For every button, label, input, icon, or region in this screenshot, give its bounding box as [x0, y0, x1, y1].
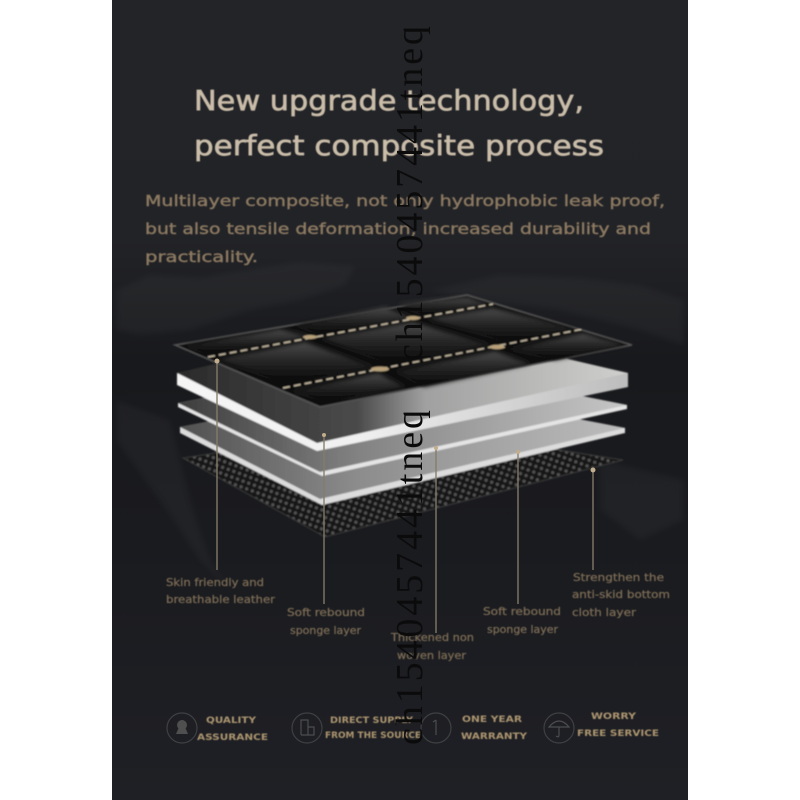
layered material illustration [175, 295, 632, 537]
watermark: lower: ch1540457441tneq [389, 410, 431, 745]
callout lines [214, 358, 596, 633]
intro paragraph: Multilayer composite, not only hydrophobic leak proof, [145, 192, 665, 210]
icon: factory [292, 713, 322, 743]
icon: umbrella [544, 713, 574, 743]
world map backdrop [116, 262, 684, 590]
feature: worry free service: WORRY [591, 712, 637, 722]
feature: direct supply [292, 713, 421, 743]
label: non woven: woven layer [397, 650, 467, 662]
label: bottom cloth: anti-skid bottom [572, 589, 670, 601]
label: bottom cloth [572, 572, 670, 619]
layer: non woven [178, 360, 627, 476]
icon: one year [421, 713, 451, 743]
title [194, 84, 604, 162]
feature: worry free service [544, 712, 659, 743]
label: lower sponge [483, 606, 561, 636]
label: bottom cloth: Strengthen the [573, 572, 664, 584]
label: lower sponge: sponge layer [487, 624, 559, 636]
layer: lower sponge [180, 385, 625, 505]
feature: worry free service: FREE SERVICE [577, 729, 659, 739]
feature: direct supply: FROM THE SOURCE [325, 731, 421, 741]
icon: medal [167, 713, 197, 743]
layer: anti-skid bottom cloth [183, 425, 623, 537]
intro paragraph: but also tensile deformation, increased durability and [145, 220, 651, 238]
page background panel [112, 0, 688, 800]
label: lower sponge: Soft rebound [483, 606, 561, 618]
feature: direct supply: DIRECT SUPPLY [330, 716, 414, 726]
label: non woven: Thickened non [390, 632, 474, 644]
layer: upper sponge [177, 320, 628, 451]
label: upper sponge: sponge layer [290, 625, 362, 637]
label: non woven [390, 632, 474, 662]
feature: warranty [421, 713, 528, 743]
label: leather: breathable leather [166, 594, 276, 606]
title: perfect composite process [194, 129, 604, 162]
watermark: upper: ch1540457441tneq [389, 26, 431, 361]
label: leather [166, 577, 276, 606]
feature: quality assurance: QUALITY [206, 716, 257, 726]
label: upper sponge [287, 607, 365, 637]
feature: warranty: ONE YEAR [462, 715, 522, 725]
stitch junctions [303, 316, 505, 371]
feature: quality assurance: ASSURANCE [197, 733, 268, 743]
title: New upgrade technology, [194, 84, 584, 117]
feature: warranty: WARRANTY [461, 732, 528, 742]
intro paragraph [145, 192, 665, 266]
label: bottom cloth: cloth layer [572, 607, 637, 619]
layer: quilted leather [175, 295, 632, 407]
label: leather: Skin friendly and [166, 577, 264, 589]
label: upper sponge: Soft rebound [287, 607, 365, 619]
intro paragraph: practicality. [145, 248, 258, 266]
feature: quality assurance [167, 713, 268, 743]
